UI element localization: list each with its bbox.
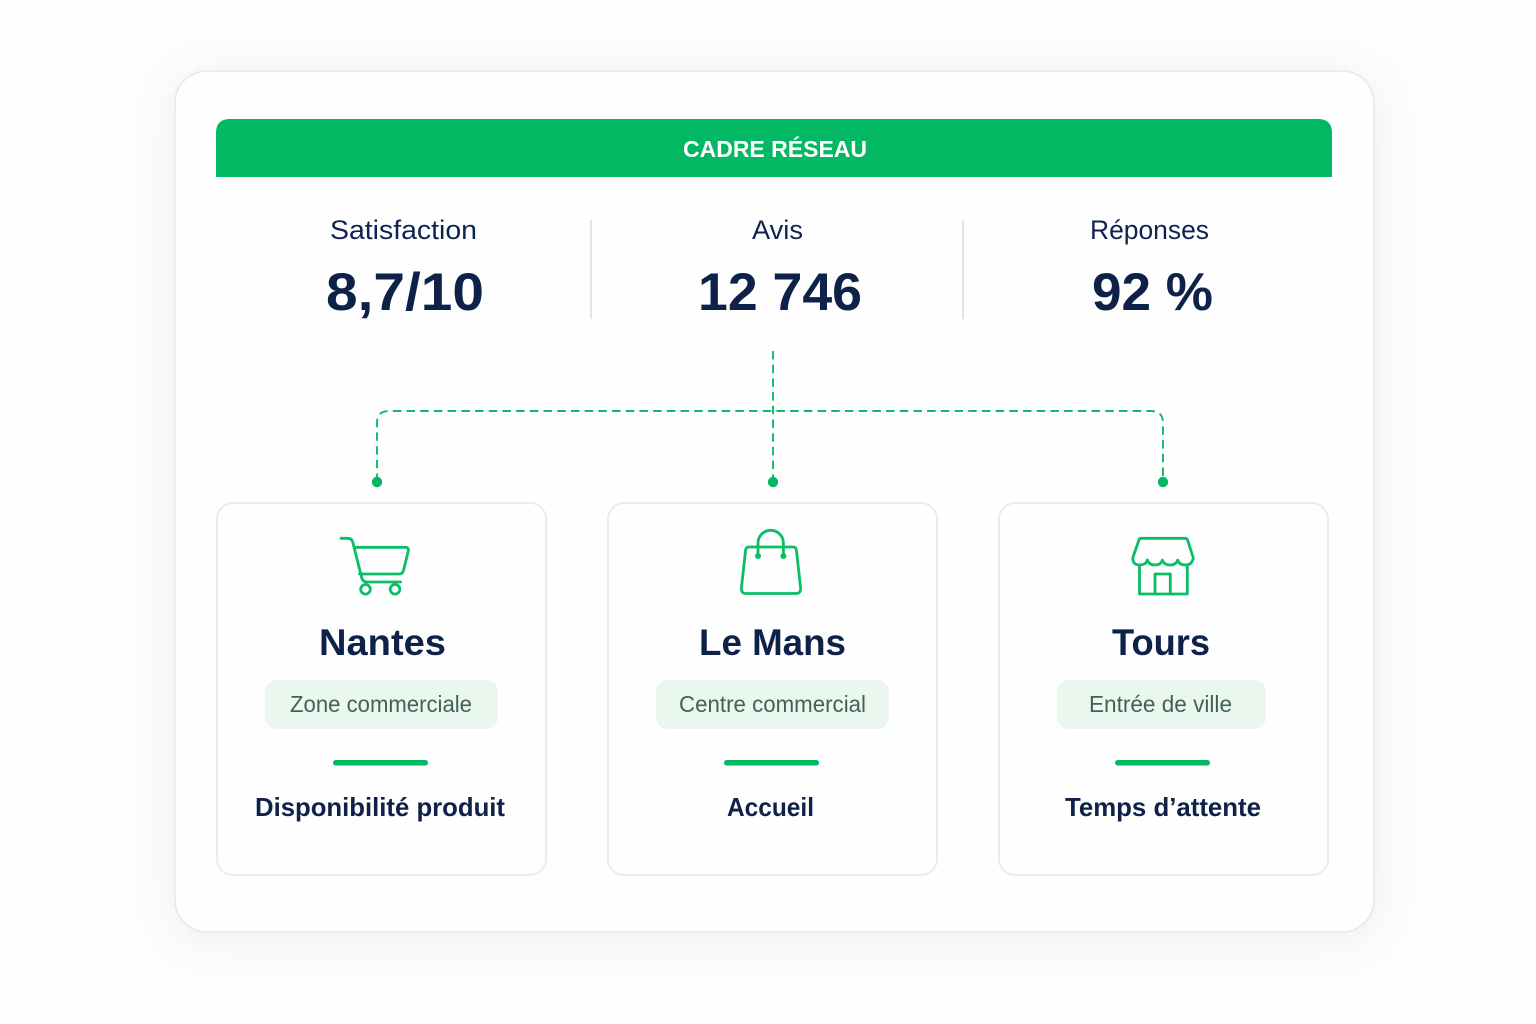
- card: Nantes: [217, 503, 546, 875]
- focus label: Disponibilité produit: [255, 792, 505, 822]
- city name: Le Mans: [699, 622, 846, 663]
- icon: shopping bag: [741, 530, 801, 594]
- stat: avis: 12 746: [698, 263, 862, 322]
- zone tag: [656, 680, 889, 729]
- stat: avis: [698, 215, 862, 322]
- header banner: [216, 119, 1332, 177]
- stat: avis: Avis: [752, 215, 803, 245]
- connector tree: [372, 351, 1168, 487]
- city name: Nantes: [319, 622, 446, 663]
- focus label: Temps d’attente: [1065, 792, 1261, 822]
- main panel: [175, 71, 1374, 932]
- icon: storefront: [1133, 538, 1193, 594]
- icon: shopping cart: [341, 538, 408, 594]
- stat: réponses: Réponses: [1090, 215, 1209, 245]
- zone tag: [265, 680, 498, 729]
- zone tag: Centre commercial: [679, 691, 866, 717]
- stat: réponses: [1090, 215, 1213, 322]
- card: Le Mans: [608, 503, 937, 875]
- zone tag: Entrée de ville: [1089, 691, 1232, 717]
- banner title: CADRE RÉSEAU: [683, 135, 867, 162]
- city name: Tours: [1112, 622, 1210, 663]
- zone tag: [1057, 680, 1266, 729]
- card: Tours: [999, 503, 1328, 875]
- stat: satisfaction: 8,7/10: [326, 263, 484, 322]
- stat: satisfaction: Satisfaction: [330, 215, 477, 245]
- stat: réponses: 92 %: [1092, 263, 1213, 322]
- zone tag: Zone commerciale: [290, 691, 472, 717]
- focus label: Accueil: [727, 792, 814, 822]
- stat: satisfaction: [326, 215, 484, 322]
